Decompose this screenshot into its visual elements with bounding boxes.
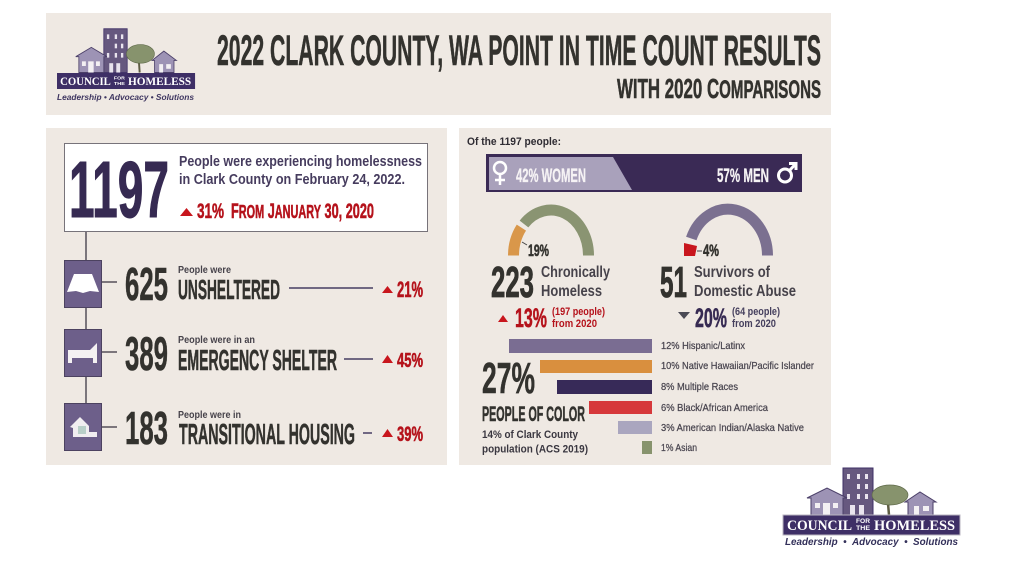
bar chart: race and ethnicity: 1% Asian [661, 442, 697, 454]
change from 2020: 31% [197, 200, 224, 223]
people of color summary: PEOPLE OF COLOR [482, 403, 585, 426]
domestic abuse stat: 51 [660, 258, 687, 307]
description [179, 154, 422, 188]
change from 2020 [180, 200, 374, 223]
row: transitional housing: 39% [397, 423, 423, 446]
logo: header: FOR [114, 75, 125, 81]
row: transitional housing [64, 402, 423, 454]
row: unsheltered: UNSHELTERED [178, 274, 280, 305]
bar chart: race and ethnicity: 6% Black/African America [661, 402, 768, 414]
chronically homeless stat: (197 people) [552, 306, 605, 318]
row: transitional housing: 183 [125, 402, 168, 454]
domestic abuse stat: 4% [703, 241, 719, 260]
people of color summary: 27% [482, 354, 535, 403]
gauge: 4% [684, 209, 768, 256]
big number 1197: 1197 [69, 145, 169, 234]
logo: header: THE [114, 81, 125, 87]
icon: male [778, 164, 796, 182]
bar chart: race and ethnicity: 10% Native Hawaiian/Pacific Islander [661, 360, 814, 372]
logo: footer: COUNCIL [787, 518, 852, 534]
people of color summary: population (ACS 2019) [482, 444, 588, 456]
row: unsheltered: People were [178, 265, 231, 276]
bar chart: race and ethnicity: 3% American Indian/Alaska Native [661, 422, 804, 434]
row: emergency shelter: 389 [125, 327, 168, 380]
gauge: 19% [514, 210, 588, 256]
domestic abuse stat: (64 people) [732, 306, 780, 318]
row: unsheltered [64, 258, 423, 310]
bar chart: race and ethnicity [509, 339, 814, 454]
panel heading: Of the 1197 people: [467, 136, 561, 148]
bar chart: race and ethnicity: 12% Hispanic/Latinx [661, 340, 746, 352]
chronically homeless stat: 19% [528, 241, 549, 260]
callout: total count [64, 144, 428, 234]
description: People were experiencing homelessness [179, 154, 422, 170]
gender bar [486, 154, 802, 192]
bar chart: race and ethnicity: 8% Multiple Races [661, 381, 738, 393]
chronically homeless stat: Homeless [541, 283, 602, 300]
domestic abuse stat: Domestic Abuse [694, 283, 796, 300]
panel: demographics [459, 128, 831, 465]
icon: bed [64, 330, 102, 376]
logo: footer: Leadership • Advocacy • Solutions [785, 537, 958, 548]
chronically homeless stat: 223 [491, 258, 534, 307]
panel: counts [46, 128, 447, 465]
people of color summary: 14% of Clark County [482, 429, 579, 441]
logo: footer [783, 468, 960, 548]
people of color summary [482, 354, 588, 456]
row: unsheltered: 21% [397, 277, 423, 302]
row: transitional housing: TRANSITIONAL HOUSING [179, 419, 355, 451]
logo: header: HOMELESS [128, 74, 192, 88]
row: emergency shelter [64, 327, 423, 380]
logo: footer: HOMELESS [874, 518, 955, 534]
icon: female [494, 162, 506, 185]
row: emergency shelter: 45% [397, 350, 423, 372]
gender bar: 57% MEN [717, 166, 769, 187]
gender bar: 42% WOMEN [516, 166, 586, 187]
domestic abuse stat: Survivors of [694, 264, 771, 281]
domestic abuse stat [660, 209, 796, 333]
logo: footer: FOR [856, 519, 871, 525]
chronically homeless stat: from 2020 [552, 318, 597, 330]
icon: tent [64, 260, 102, 308]
domestic abuse stat: from 2020 [732, 318, 776, 330]
domestic abuse stat: 20% [695, 303, 727, 333]
change from 2020: FROM JANUARY 30, 2020 [231, 200, 374, 223]
row: emergency shelter: EMERGENCY SHELTER [178, 345, 337, 377]
logo: header [57, 29, 195, 102]
logo: footer: THE [856, 526, 870, 532]
icon: house [64, 404, 102, 450]
subtitle: WITH 2020 COMPARISONS [617, 73, 821, 104]
row: transitional housing: People were in [178, 410, 241, 421]
row: emergency shelter: People were in an [178, 335, 255, 346]
logo: header: Leadership • Advocacy • Solutions [57, 92, 194, 102]
panel: header [46, 13, 831, 115]
chronically homeless stat: 13% [515, 303, 547, 333]
logo: header: COUNCIL [60, 74, 111, 88]
row: unsheltered: 625 [125, 258, 168, 310]
description: in Clark County on February 24, 2022. [179, 172, 405, 188]
chronically homeless stat [491, 210, 610, 333]
chronically homeless stat: Chronically [541, 264, 610, 281]
